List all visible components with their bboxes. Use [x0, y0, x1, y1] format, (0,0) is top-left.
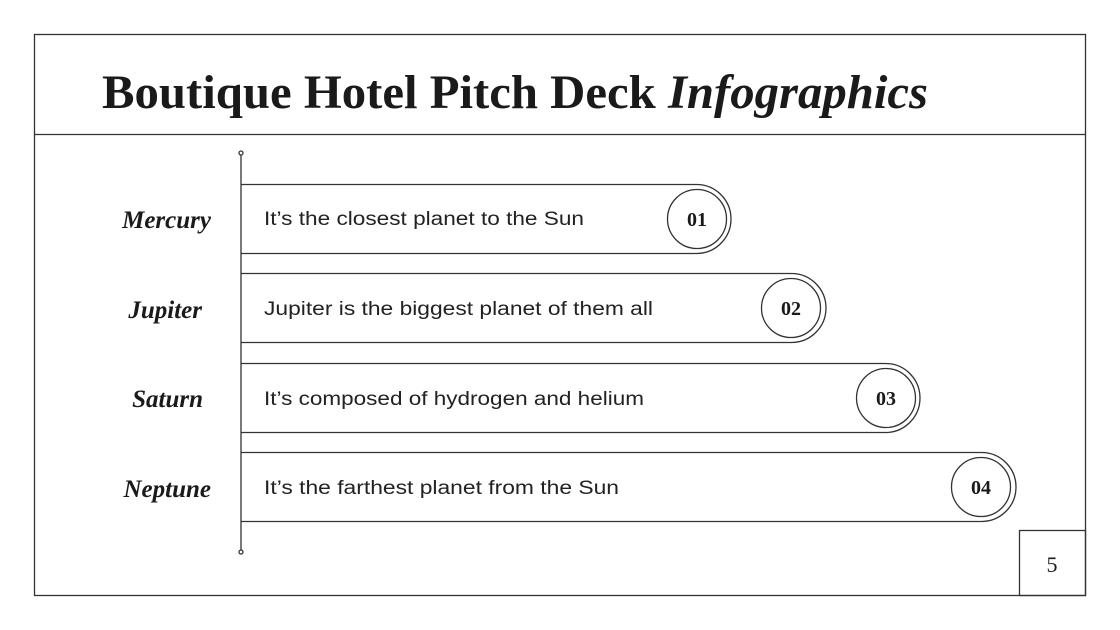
row 4: Neptune: Neptune [122, 476, 211, 503]
title: Boutique Hotel Pitch Deck Infographics [102, 66, 928, 119]
row 2: Jupiter: Jupiter is the biggest planet of them all [264, 299, 653, 320]
row 4: Neptune: 04 [971, 477, 991, 499]
row 4: Neptune [122, 452, 1016, 522]
row 3: Saturn: It’s composed of hydrogen and helium [264, 389, 644, 410]
row 2: Jupiter: 02 [781, 298, 801, 320]
row 1: Mercury: 01 [687, 209, 707, 231]
page number [1020, 530, 1086, 596]
row 3: Saturn [132, 364, 920, 432]
page number: 5 [1046, 552, 1058, 577]
row 3: Saturn: Saturn [132, 386, 203, 413]
row 1: Mercury: Mercury [121, 207, 212, 234]
timeline axis [239, 151, 243, 554]
row 2: Jupiter [127, 274, 826, 342]
row 4: Neptune: It’s the farthest planet from the Sun [264, 478, 619, 499]
row 1: Mercury: It’s the closest planet to the Sun [264, 209, 584, 230]
row 3: Saturn: 03 [876, 388, 896, 410]
row 1: Mercury [121, 184, 731, 254]
row 2: Jupiter: Jupiter [127, 297, 202, 324]
